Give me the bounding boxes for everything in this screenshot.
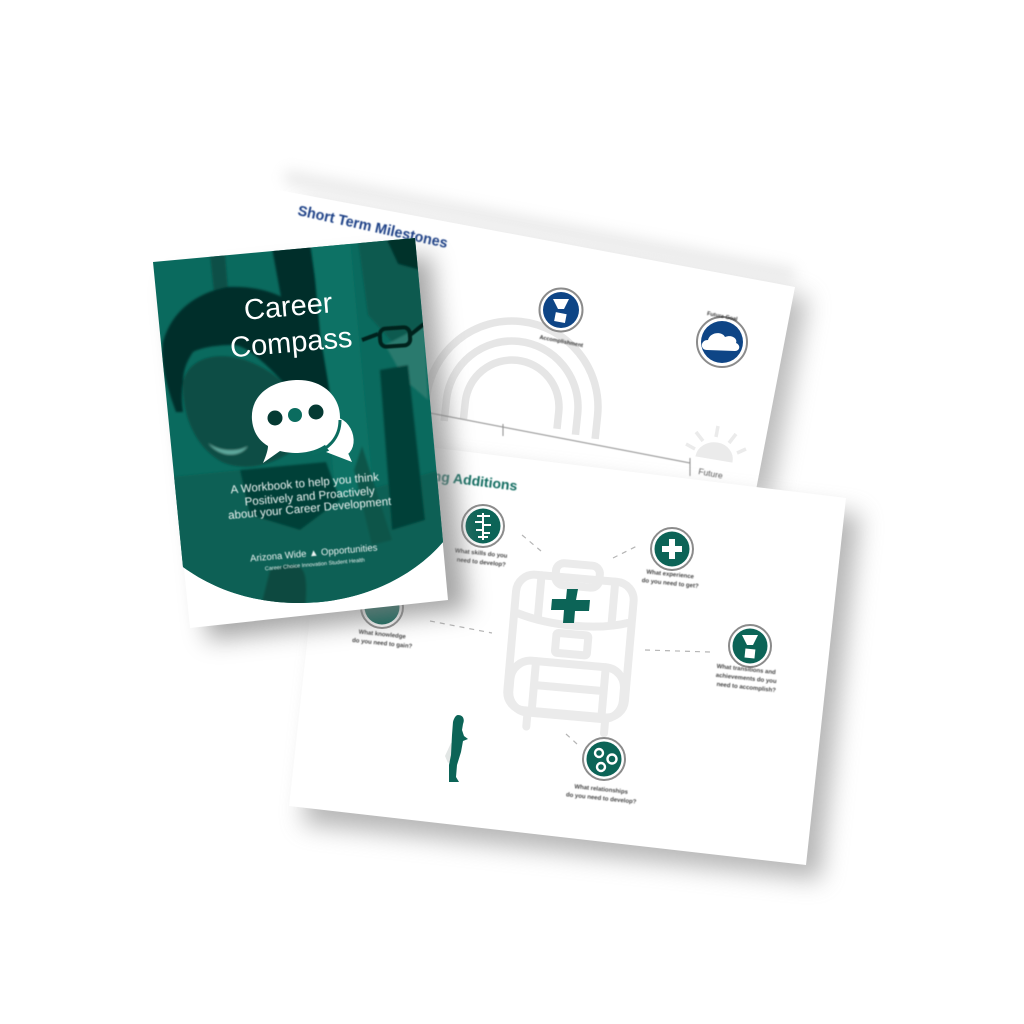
caption: relationships <box>566 784 637 806</box>
caption: accomplishment: Accomplishment <box>539 335 584 349</box>
logo: organisation name: Arizona Wide ▲ Opportunities <box>250 542 378 565</box>
icon: experience plus circle <box>651 528 693 570</box>
subtitle: A Workbook to help you think <box>230 472 380 496</box>
subtitle: Positively and Proactively <box>244 485 375 509</box>
caption: transitions: achievements do you <box>715 673 777 685</box>
heading: short term milestones: Short Term Milestones <box>296 203 449 252</box>
dashed connectors <box>430 535 710 744</box>
panel: additions sheet <box>289 435 860 880</box>
caption: experience <box>641 570 699 590</box>
caption: transitions: What transitions and <box>716 664 776 676</box>
title: career compass: Compass <box>229 322 354 364</box>
subtitle <box>228 472 393 522</box>
caption: relationships: What relationships <box>574 784 629 796</box>
icon: relationships circle <box>583 738 625 780</box>
subtitle: about your Career Development <box>228 496 393 522</box>
illustration: grey backpack <box>504 559 636 735</box>
icon: grey sun <box>686 426 746 462</box>
label: future: Future <box>698 466 724 481</box>
icon: large green cross <box>551 589 590 623</box>
panel: short term milestones sheet <box>260 170 808 500</box>
panel: career compass cover <box>140 225 468 640</box>
icon: speech bubbles <box>252 380 359 463</box>
icon: trophy milestone <box>540 288 582 332</box>
timeline <box>430 413 690 476</box>
title: career compass <box>229 287 354 364</box>
product mockup scene <box>153 170 872 892</box>
caption: skills: What skills do you <box>455 548 508 560</box>
icon: skills tree circle <box>462 505 504 547</box>
caption: experience: What experience <box>646 570 695 581</box>
caption: knowledge: do you need to gain? <box>352 638 413 650</box>
cover photo in teal duotone <box>153 238 443 603</box>
caption: transitions: need to accomplish? <box>716 682 776 694</box>
caption: knowledge: What knowledge <box>358 630 407 641</box>
caption: experience: do you need to get? <box>641 578 699 590</box>
caption: relationships: do you need to develop? <box>566 792 637 806</box>
icon: trophy circle <box>729 625 771 667</box>
caption: skills: need to develop? <box>456 557 506 569</box>
caption: transitions <box>715 664 777 694</box>
logo: organisation name: Career Choice Innovation Student Health <box>265 558 365 572</box>
icon: future cloud <box>697 317 747 367</box>
glasses <box>362 324 424 347</box>
heading: additions: Packing Additions <box>396 463 518 494</box>
caption: future goal: Future Goal <box>706 311 738 323</box>
illustration: person with backpack <box>445 715 468 782</box>
caption: knowledge <box>352 630 413 650</box>
icon: knowledge circle <box>361 586 403 628</box>
caption: skills <box>455 548 508 569</box>
chart: grey rainbow arcs <box>424 312 607 439</box>
title: career compass: Career <box>243 287 334 327</box>
